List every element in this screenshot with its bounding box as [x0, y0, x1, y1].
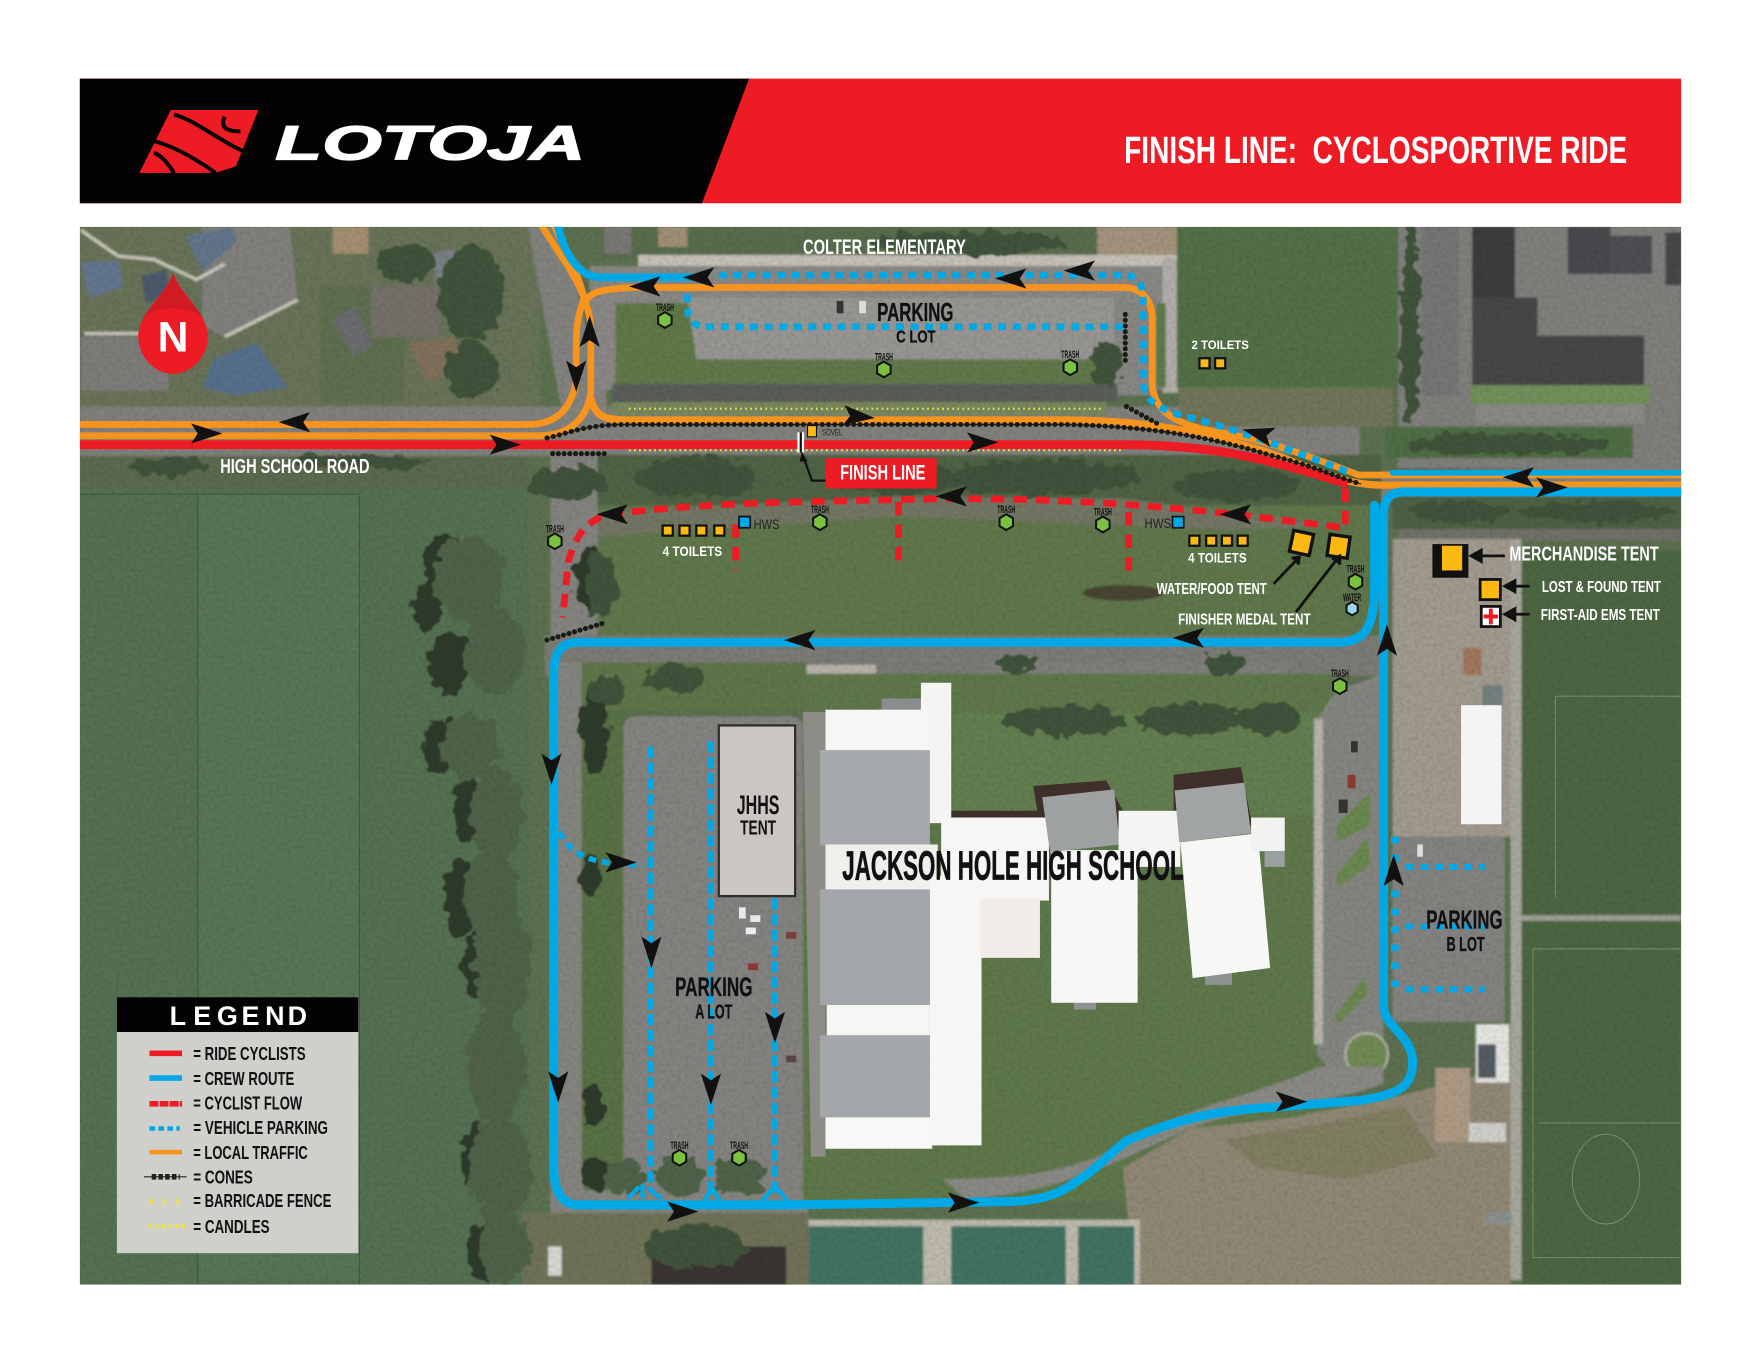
icon: trash stations: TRASH — [997, 504, 1015, 516]
map labels: WATER/FOOD TENT — [1157, 581, 1267, 598]
legend labels: = RIDE CYCLISTS — [193, 1043, 306, 1064]
legend labels — [193, 1043, 331, 1237]
West drive — [550, 663, 584, 1213]
legend labels: = CREW ROUTE — [193, 1068, 294, 1089]
local traffic route (orange) — [80, 227, 1681, 485]
lawn & tree strip — [573, 455, 1381, 505]
JHHS tent: TENT — [740, 817, 777, 839]
JHHS tent — [719, 725, 795, 896]
cyclist flow route (red dashed) — [563, 488, 1345, 618]
aerial background — [80, 227, 1681, 1285]
map labels: FINISHER MEDAL TENT — [1178, 611, 1311, 628]
parked cars — [739, 301, 1423, 1062]
map labels — [220, 235, 1661, 628]
icon: trash stations: TRASH — [546, 523, 564, 535]
roads — [528, 227, 607, 410]
fields — [80, 483, 529, 1285]
aerial map panel: HWS — [1144, 516, 1171, 531]
map labels: COLTER ELEMENTARY — [803, 235, 966, 259]
icon: hand wash stations — [739, 426, 1184, 528]
icon: trash stations: TRASH — [1331, 668, 1349, 680]
cones line — [547, 314, 1361, 640]
map labels: FIRST-AID EMS TENT — [1541, 607, 1660, 624]
school grounds — [803, 674, 1331, 1202]
parking labels: A LOT — [695, 1002, 733, 1024]
icon: north marker: N — [158, 313, 188, 361]
parking labels: B LOT — [1446, 934, 1485, 956]
barricade fence and candles — [629, 409, 1123, 450]
legend labels: = CONES — [193, 1167, 253, 1188]
map labels: HIGH SCHOOL ROAD — [220, 456, 370, 478]
tents — [1289, 530, 1500, 627]
Lotoja wordmark: LOTOJA — [275, 116, 585, 170]
icon: trash stations: TRASH — [656, 302, 674, 314]
vehicle parking routes (blue dashed) — [687, 275, 1485, 994]
legend swatches — [144, 1053, 187, 1226]
icon: trash stations: TRASH — [811, 504, 829, 516]
Tennis — [803, 1220, 1140, 1285]
aerial map panel: SOVEL — [822, 428, 842, 438]
panel: legend — [117, 997, 358, 1253]
icon: trash stations: TRASH — [730, 1140, 748, 1152]
map labels: MERCHANDISE TENT — [1509, 543, 1659, 565]
icon: north marker — [138, 273, 208, 374]
aerial map panel: HWS — [754, 517, 779, 532]
icon: toilets — [663, 358, 1248, 546]
aerial map panel — [80, 227, 1681, 1285]
legend labels: = CYCLIST FLOW — [193, 1092, 303, 1113]
Field top right — [1177, 227, 1398, 387]
legend heading: LEGEND — [170, 1001, 307, 1031]
ride cyclists route (red) — [80, 445, 1348, 484]
parking labels: PARKING — [675, 972, 752, 1002]
icon: trash stations — [546, 302, 1364, 1166]
legend labels: = VEHICLE PARKING — [193, 1117, 328, 1138]
map labels: LOST & FOUND TENT — [1542, 579, 1661, 596]
tent pointer arrows — [1274, 550, 1530, 620]
map labels: 2 TOILETS — [1192, 338, 1249, 352]
NW neighbourhood — [81, 337, 169, 391]
icon: trash stations: TRASH — [671, 1140, 688, 1152]
icon: trash stations: TRASH — [875, 351, 893, 363]
Jackson Hole High School building — [803, 683, 1285, 1157]
dirt S — [1123, 1067, 1510, 1285]
icon: trash stations: TRASH — [1061, 349, 1079, 361]
icon: trash stations: WATER — [1343, 592, 1361, 604]
aerial map panel: TRASH — [1347, 564, 1364, 576]
crew route parking spurs — [629, 1186, 786, 1199]
map labels: 4 TOILETS — [1188, 551, 1247, 566]
parking labels: C LOT — [896, 326, 936, 346]
map labels: 4 TOILETS — [663, 544, 722, 559]
NE complex — [1398, 227, 1681, 468]
finish line label: FINISH LINE — [840, 460, 925, 484]
legend labels: = CANDLES — [193, 1216, 270, 1237]
aerial grain — [80, 227, 1681, 1285]
field lines — [80, 494, 1681, 1285]
east lot building — [1461, 705, 1501, 824]
parking labels: PARKING — [877, 299, 953, 327]
finish line marker — [797, 432, 937, 488]
south strip right — [1393, 496, 1681, 529]
crew route (blue) — [554, 227, 1681, 1205]
icon: trash stations: TRASH — [1094, 506, 1112, 518]
direction arrows — [191, 261, 1568, 1222]
parking labels: PARKING — [1426, 907, 1503, 935]
East lots — [1393, 539, 1510, 837]
Colter area — [602, 227, 1096, 258]
icon: Lotoja logo mark — [139, 110, 258, 173]
Jackson Hole High School label: JACKSON HOLE HIGH SCHOOL — [842, 842, 1184, 888]
JHHS tent: JHHS — [737, 790, 779, 820]
tree belts — [129, 227, 1673, 1282]
legend labels: = BARRICADE FENCE — [193, 1190, 331, 1211]
mid roads — [545, 636, 1387, 676]
header banner — [80, 79, 1681, 203]
icon: first aid cross — [1484, 609, 1498, 624]
legend labels: = LOCAL TRAFFIC — [193, 1142, 308, 1163]
parking labels — [675, 299, 1503, 1024]
